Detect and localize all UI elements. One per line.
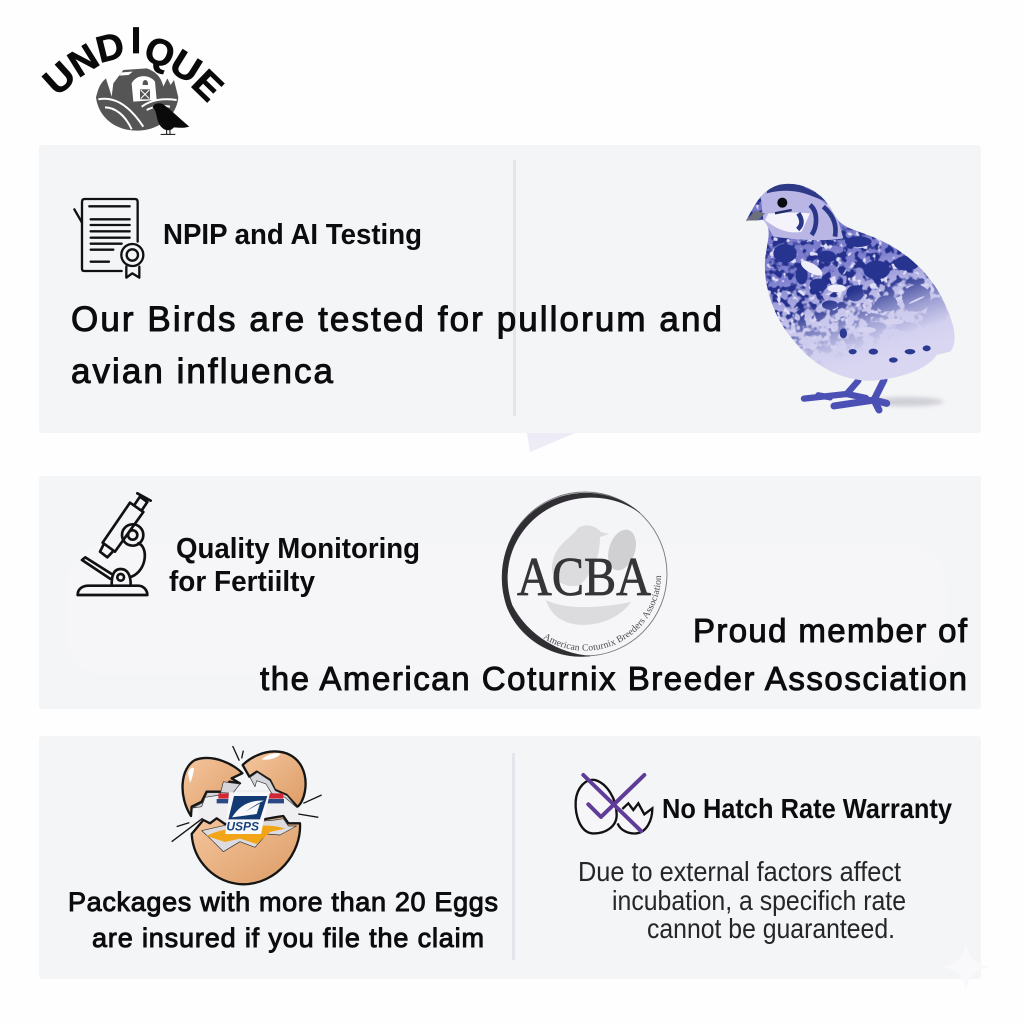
- text: bird testing statement: [71, 300, 722, 391]
- logo art: faint quail, egg and feather: [546, 525, 641, 625]
- heading: quality monitoring for fertility: [169, 533, 420, 598]
- text: warranty explanation: [578, 856, 906, 944]
- logo barn emblem: [96, 68, 178, 131]
- text: warranty explanation: cannot be guaranteed.: [647, 913, 895, 944]
- logo wordmark: I: [131, 20, 141, 61]
- heading: quality monitoring for fertility: for Fertiilty: [169, 566, 315, 598]
- text: warranty explanation: Due to external factors affect: [578, 856, 901, 887]
- logo wordmark: D: [92, 24, 128, 71]
- text: ACBA membership: the American Coturnix Breeder Assosciation: [260, 660, 967, 697]
- icon: certificate with ribbon: [74, 199, 143, 278]
- text: warranty explanation: incubation, a specifich rate: [612, 885, 906, 916]
- text: bird testing statement: Our Birds are tested for pullorum and: [71, 300, 722, 339]
- logo: Undique farm badge: [36, 20, 231, 134]
- text: insurance note: [68, 887, 498, 953]
- logo lettering: ACBA: [517, 546, 651, 607]
- panel: quality monitoring and ACBA: [39, 476, 981, 709]
- text: ACBA membership: Proud member of: [693, 612, 968, 649]
- logo quail silhouette: [153, 103, 189, 134]
- icon: sparkle watermark: [942, 943, 990, 991]
- heading: quality monitoring for fertility: Quality Monitoring: [176, 533, 420, 565]
- logo wordmark: Q: [139, 28, 180, 77]
- text: ACBA membership: [260, 612, 968, 697]
- illustration: blue quail: [746, 183, 967, 410]
- heading: no hatch rate warranty: No Hatch Rate Warranty: [662, 793, 952, 824]
- icon: cracked egg with USPS logo: [172, 746, 322, 884]
- logo wordmark: N: [60, 35, 106, 85]
- panel: insurance and hatch warranty: [39, 736, 981, 979]
- logo wordmark: U: [163, 42, 208, 92]
- text: insurance note: Packages with more than 20 Eggs: [68, 887, 498, 917]
- logo wordmark: U: [36, 54, 84, 104]
- logo: American Coturnix Breeders Association: [502, 492, 668, 657]
- text: bird testing statement: avian influenca: [71, 352, 334, 391]
- logo wordmark: E: [184, 62, 231, 110]
- icon: crossed-out eggs: [576, 775, 652, 833]
- heading: NPIP and AI Testing: NPIP and AI Testing: [163, 219, 422, 251]
- logo ring text: American Coturnix Breeders Association: [543, 576, 662, 651]
- icon: microscope: [78, 493, 151, 595]
- panel: NPIP and AI testing: [39, 145, 981, 452]
- text: insurance note: are insured if you file the claim: [92, 923, 484, 953]
- icon: cracked egg with USPS logo: USPS: [226, 820, 260, 834]
- logo ring: [502, 492, 667, 657]
- logo wordmark: [36, 20, 231, 110]
